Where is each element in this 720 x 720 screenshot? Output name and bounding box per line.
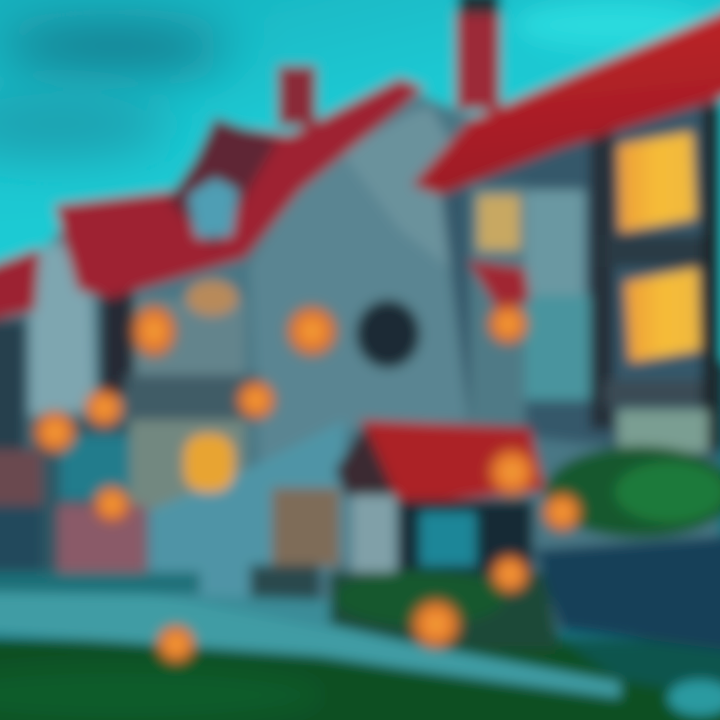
porch roof — [335, 420, 545, 575]
round window — [356, 300, 420, 368]
roof: main — [0, 78, 425, 322]
roof: right wing — [412, 5, 720, 312]
lawn and path — [0, 572, 720, 720]
right wing walls — [440, 95, 720, 460]
ground lights — [155, 491, 583, 665]
house walls — [0, 95, 720, 640]
yellow windows — [184, 132, 700, 492]
chimneys — [278, 0, 500, 126]
glowing lights — [32, 280, 538, 524]
sky — [0, 0, 720, 360]
bushes and garden wall — [335, 446, 720, 652]
